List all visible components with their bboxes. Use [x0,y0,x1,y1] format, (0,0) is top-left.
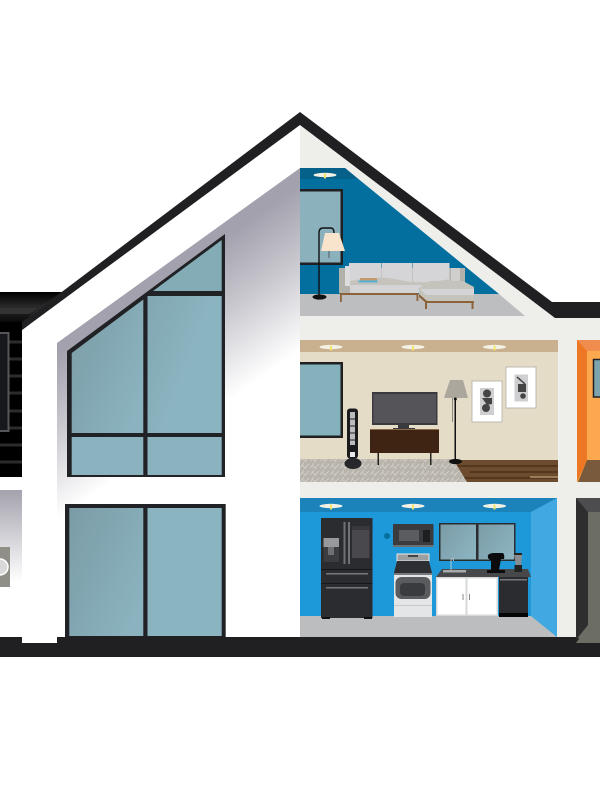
room window [300,189,343,265]
roof outline [22,112,600,330]
back wall [577,340,600,482]
back wall [300,498,557,637]
ceiling strip [300,168,358,179]
base cabinets [436,577,498,616]
floor [576,625,600,643]
base slab [0,637,600,657]
ceiling lights [320,504,506,510]
white exterior wall [22,120,300,643]
window [594,360,600,397]
ceiling [577,340,600,351]
left wing: roof and dark siding [0,292,62,477]
dishwasher [499,577,528,617]
television [372,392,438,430]
ceiling light [314,173,336,178]
tower fan [344,408,362,469]
panel: orange room [577,340,600,482]
panel: dark garage room [576,498,600,643]
shaded interior wall [57,168,300,640]
range oven [394,554,432,617]
wood floor [300,460,558,482]
ceiling [300,498,557,512]
right side wall [531,498,557,637]
panel: kitchen [300,498,557,637]
media console [370,429,439,465]
panel: top living room [300,168,525,316]
microwave [393,524,434,547]
side wall [577,340,587,482]
wall dot [384,533,390,539]
room wall [300,340,558,482]
framed art 2 [506,367,536,408]
side wall [576,498,588,640]
blender [514,553,522,572]
countertop with sink [436,558,531,577]
framed art 1 [472,381,502,422]
sofa [339,263,474,309]
left wing: wall panel [0,333,8,431]
panel: middle TV room [300,340,558,482]
upper large window [67,234,225,477]
floor lamp [312,228,345,300]
back wall [576,498,600,638]
room window [300,362,343,438]
floor [300,294,525,316]
refrigerator [321,518,372,619]
icon: appliance in left wing [0,547,10,587]
lower large window [65,504,226,637]
off-white section wall [300,120,600,640]
kitchen window [439,523,516,561]
patterned rug [300,459,467,482]
ceiling lights [320,345,506,350]
stand mixer [487,553,505,573]
ceiling [576,498,600,512]
room wall [300,168,499,294]
left wing: lower shaded room [0,490,22,582]
ceiling band [300,340,558,352]
floor lamp [444,380,468,464]
floor [300,616,557,637]
floor [578,460,600,482]
